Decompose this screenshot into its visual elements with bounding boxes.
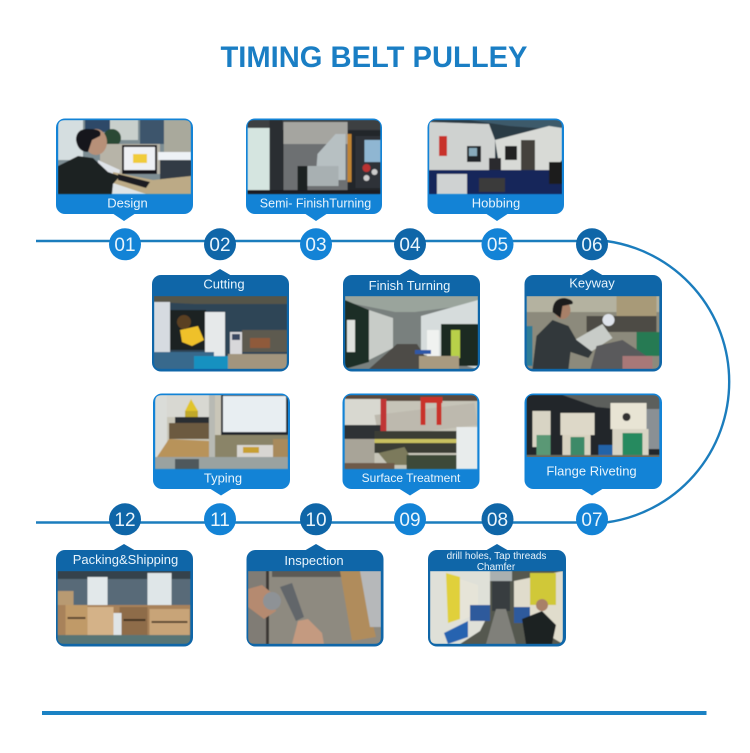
step 06 [576, 228, 608, 260]
label: Chamfer [477, 562, 516, 573]
card 04: Finish Turning [343, 269, 480, 372]
label: Keyway [569, 276, 615, 290]
photo: packed crates in warehouse [58, 571, 190, 644]
step 11 [204, 503, 236, 535]
card 09: Surface Treatment [342, 394, 480, 496]
step 02: 02 [209, 235, 231, 256]
photo: surface treatment line [344, 395, 478, 469]
step 05 [482, 228, 514, 260]
card 05: Hobbing [428, 118, 564, 221]
photo: hobbing machines [429, 120, 562, 194]
step circles, top row [109, 228, 608, 260]
photo: drilling machine aisle [430, 571, 563, 644]
label: Flange Riveting [546, 464, 637, 478]
label band under photo [526, 457, 660, 471]
label: Finish Turning [369, 278, 450, 293]
card 07: Flange Riveting [524, 394, 662, 496]
step 04 [394, 228, 426, 260]
photo: finish turning line [345, 296, 478, 369]
label: Semi- FinishTurning [260, 196, 371, 210]
step 10 [300, 503, 332, 535]
card 08: Drill holes, tap threads, chamfer [428, 544, 566, 646]
photo: laser marking station [155, 395, 288, 469]
step 04: 04 [399, 235, 421, 256]
label: Surface Treatment [362, 471, 461, 485]
step 08 [482, 503, 514, 535]
step 01: 01 [114, 235, 136, 256]
step 07 [576, 503, 608, 535]
card 01: Design [56, 118, 193, 221]
step 03 [300, 228, 332, 260]
card 02: Cutting [152, 269, 289, 372]
timeline: top line, arc and bottom line [36, 241, 729, 522]
step 05: 05 [487, 235, 508, 256]
card 12: Packing & Shipping [56, 544, 193, 646]
step circles, bottom row [109, 503, 608, 535]
step 03: 03 [305, 235, 327, 256]
step 11: 11 [210, 510, 230, 531]
step 08: 08 [487, 510, 508, 531]
label: Cutting [203, 276, 245, 292]
step 12: 12 [114, 510, 136, 531]
card 03: Semi-Finish Turning [246, 118, 382, 221]
photo: cutting workshop [154, 296, 287, 369]
label [447, 551, 546, 573]
photo: riveting presses [526, 395, 660, 458]
photo: designer at computer [58, 120, 191, 194]
label: drill holes, Tap threads [447, 551, 546, 562]
photo: CNC lathe [248, 120, 380, 194]
step 12 [109, 503, 141, 535]
step 10: 10 [305, 510, 327, 531]
card 06: Keyway [524, 269, 662, 372]
step 07: 07 [581, 510, 603, 531]
step 02 [204, 228, 236, 260]
title: TIMING BELT PULLEY [220, 41, 528, 74]
photo: worker at keyway machine [526, 296, 660, 369]
bottom bar [42, 711, 706, 715]
step 01 [109, 228, 141, 260]
card 11: Typing [153, 394, 290, 496]
step 09: 09 [399, 510, 421, 531]
label: Hobbing [472, 196, 520, 210]
label: Design [107, 196, 148, 210]
photo: caliper measurement [248, 571, 381, 644]
label: Inspection [284, 553, 344, 568]
label: Packing&Shipping [73, 552, 178, 567]
label: Typing [204, 470, 242, 486]
step 09 [394, 503, 426, 535]
step 06: 06 [581, 235, 603, 256]
card 10: Inspection [246, 544, 384, 646]
